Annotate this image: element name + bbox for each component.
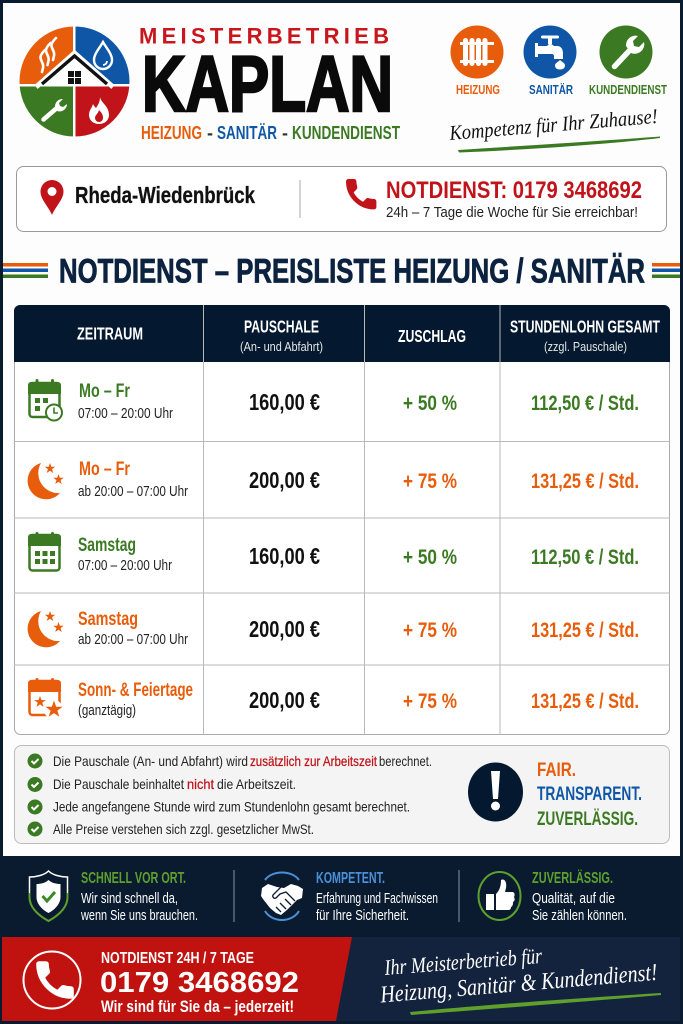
note 1: Die Pauschale (An- und Abfahrt) wird [53,753,248,769]
benefit: kompetent: Erfahrung und Fachwissen [316,891,438,907]
benefit: kompetent [261,870,438,924]
info box [16,166,666,232]
benefit: kompetent: KOMPETENT. [316,870,385,887]
row: Mo-Fr day: Mo – Fr [79,380,130,402]
service labels: SANITÄR [529,82,573,97]
row: Samstag day: 160,00 € [249,543,320,569]
service labels [456,82,667,97]
service labels: HEIZUNG [456,82,500,97]
icon: calendar clock [28,379,62,420]
row: Samstag night: ab 20:00 – 07:00 Uhr [78,632,188,648]
red emergency banner: Wir sind für Sie da – jederzeit! [101,997,294,1016]
note 2: die Arbeitszeit. [217,776,296,792]
row: Samstag day [28,532,639,574]
benefit: kompetent: für Ihre Sicherheit. [316,908,409,924]
row: Sonn- und Feiertage: 131,25 € / Std. [531,690,639,713]
slogan swoosh [410,993,661,1015]
icon: moon and stars [28,463,64,499]
row: Samstag day: 112,50 € / Std. [531,546,639,569]
row: Sonn- und Feiertage: + 75 % [403,690,457,713]
benefit: schnell vor ort: SCHNELL VOR ORT. [81,870,186,887]
heading stripes right [652,263,680,278]
row: Samstag day: + 50 % [403,546,457,569]
benefit: zuverlaessig: ZUVERLÄSSIG. [532,869,613,887]
brand tagline: HEIZUNG [141,123,202,143]
row: Mo-Fr night: 131,25 € / Std. [531,470,639,493]
icon: radiator [450,26,504,78]
benefit: zuverlaessig: Sie zählen können. [532,908,627,924]
row: Samstag day: 07:00 – 20:00 Uhr [78,558,172,574]
note 2: Die Pauschale beinhaltet [53,776,184,792]
benefit: schnell vor ort: wenn Sie uns brauchen. [80,908,198,924]
brand tagline: SANITÄR [217,123,277,143]
icon: thumbs up [478,872,520,920]
row: Sonn- und Feiertage: (ganztägig) [78,703,136,719]
row: Mo-Fr day: 07:00 – 20:00 Uhr [78,406,173,422]
heading stripes left [3,263,48,278]
table header: (An- und Abfahrt) [240,339,323,354]
slogan underline swoosh [458,136,660,152]
icon: water tap [524,26,576,78]
note 4: Alle Preise verstehen sich zzgl. gesetzlicher MwSt. [53,821,314,837]
icon: location pin [40,180,64,215]
table header: ZEITRAUM [77,324,143,344]
brand tagline: KUNDENDIENST [292,123,400,143]
benefit: schnell vor ort: Wir sind schnell da, [81,891,178,907]
row: Samstag night [28,608,639,648]
icon: wrench [600,26,652,78]
city: Rheda-Wiedenbrück [75,182,255,208]
brand: MEISTERBETRIEB: MEISTERBETRIEB [139,24,389,48]
row: Mo-Fr night: Mo – Fr [79,458,130,480]
row: Mo-Fr night: 200,00 € [249,467,320,493]
table header: PAUSCHALE [244,316,319,336]
row: Samstag night: Samstag [78,608,138,630]
icon: handshake [261,872,303,920]
benefit: zuverlaessig [478,869,627,924]
table header: (zzgl. Pauschale) [544,339,627,354]
note 2 [28,776,296,792]
availability: 24h – 7 Tage die Woche für Sie erreichbar! [386,204,638,221]
note 1: zusätzlich zur Arbeitszeit [250,753,377,769]
red emergency banner: 0179 3468692 [100,967,299,999]
price table [14,305,670,735]
row: Mo-Fr day: + 50 % [403,392,457,415]
icon: calendar [28,532,61,570]
slogan panel background [330,937,680,1021]
notes panel [14,746,670,844]
row: Samstag night: 200,00 € [249,616,320,642]
row: Mo-Fr day [28,379,639,422]
icon: phone circle [24,952,80,1008]
red emergency banner: NOTDIENST 24H / 7 TAGE [101,950,254,967]
values: TRANSPARENT. [537,784,642,805]
benefit: schnell vor ort [30,870,198,924]
row: Sonn- und Feiertage: 200,00 € [249,687,320,713]
icon: phone [347,180,376,209]
row: Mo-Fr night [28,458,639,500]
red emergency banner [2,937,352,1021]
row: Samstag night: 131,25 € / Std. [531,619,639,642]
row: Mo-Fr night: + 75 % [403,470,457,493]
logo emblem [19,26,130,140]
brand tagline [141,123,400,143]
icon: exclamation [468,762,523,822]
row: Samstag night: + 75 % [403,619,457,642]
values: ZUVERLÄSSIG. [537,809,638,830]
table header [14,305,670,362]
values [537,760,642,830]
note 3: Jede angefangene Stunde wird zum Stundenlohn gesamt berechnet. [53,798,410,814]
table header: ZUSCHLAG [398,326,466,346]
icon: moon and stars [28,611,64,647]
row: Sonn- und Feiertage [28,678,639,719]
row: Sonn- und Feiertage: Sonn- & Feiertage [78,679,193,701]
note 2: nicht [187,776,214,792]
brand tagline: - [207,123,213,143]
row: Mo-Fr day: 112,50 € / Std. [531,392,639,415]
row: Samstag day: Samstag [78,534,136,556]
note 1: berechnet. [379,753,432,769]
brand: KAPLAN: KAPLAN [142,39,393,128]
benefit: zuverlaessig: Qualität, auf die [532,891,615,907]
icon: calendar with stars [28,678,63,718]
row: Mo-Fr day: 160,00 € [249,389,320,415]
values: FAIR. [537,760,576,781]
icon: shield [30,871,68,921]
note 1 [28,753,432,769]
row: Mo-Fr night: ab 20:00 – 07:00 Uhr [78,484,188,500]
brand tagline: - [282,123,288,143]
slogan: Kompetenz: Kompetenz für Ihr Zuhause! [448,104,659,145]
slogan line 1: Ihr Meisterbetrieb für [383,943,543,980]
